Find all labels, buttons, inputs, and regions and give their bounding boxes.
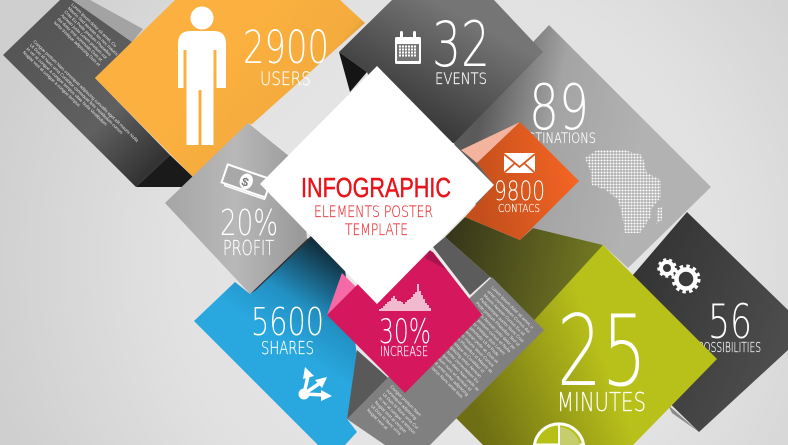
panel: dark events [339,0,543,150]
square [450,245,717,445]
stat: 30%: 30% [379,312,431,352]
panel: blue shares [194,235,357,445]
lorem text lower: Congue pretium Nam consequat adipiscing convallis eget elit mauris Nulla [32,39,140,143]
subtitle line 2: TEMPLATE [345,220,408,239]
diamond [95,0,365,177]
lorem text upper: mauris tortor consectetuer Eu [436,340,480,384]
stat: 56: 56 [708,295,752,350]
peach fold [461,122,520,163]
light pink fold [327,273,357,315]
lorem text upper: Cras Eu Aenean justo dolor pe [471,305,517,351]
icon: calendar [395,31,421,64]
stat: 9800: 9800 [494,176,545,207]
lorem text lower: In vel at congue a tempus [378,396,417,435]
label: minutes: MINUTES [557,388,646,418]
square [165,123,307,294]
label: increase: INCREASE [380,345,428,360]
label: contacs: CONTACS [498,202,540,215]
lorem text upper: dui dolor tristique duis Lorem [463,312,507,356]
lorem text upper: Aenean Phasellus id Mauris sit [448,328,494,374]
panel: white title diamond [260,66,494,304]
icon: share arrows [299,367,332,401]
lorem text upper: Pede pretium Phasellus Sed ut [475,301,521,347]
lorem text upper: Sed nec mauris lacus Cursus [451,324,496,369]
lorem text upper: Lorem ipsum dolor Nam pede ac [432,344,481,393]
diamond clipped by the title card [465,122,579,240]
square [339,0,543,150]
panel: orange users [95,0,365,177]
lorem text upper: Duis tristique et Curabitur id [444,332,486,374]
fold [668,405,699,432]
panel: pink increase [327,240,482,393]
stat: 25: 25 [557,295,647,409]
panel: dark 56 possibilities [590,212,788,432]
lorem text upper: amet consectetuer Cursus dui [486,289,531,334]
panel: grey profit [165,123,313,294]
square [454,25,711,268]
icon: envelope [504,153,535,173]
label: destinations: DESTINATIONS [512,131,596,147]
lorem text lower: Congue pretium Nam [389,384,423,417]
dark triangle [347,350,405,419]
label: profit: PROFIT [223,236,274,260]
icon: clock [534,424,584,445]
label: events: EVENTS [435,69,487,88]
square [590,212,788,432]
lorem text lower: In vel at congue a congue tempus vitae Nulla Vestibulum [25,46,108,127]
lorem text upper: Lorem ipsum dolor sit amet, Cu [70,2,118,48]
fold: light grey [72,0,143,42]
lorem text lower: Ut Duis Id Nunc urna [370,404,403,436]
sheet [347,277,544,445]
lorem text upper: Aenean justo Lorem pretium cur [60,13,109,60]
lorem text upper: tortor tristique adipiscing Duis et [53,20,102,68]
fold: black [136,155,193,187]
lorem text upper: Mauris Sed aenean leo nec mauris [67,6,120,57]
stat: 89: 89 [529,71,589,144]
lorem text lower: consequat adipiscing [385,388,418,421]
lorem text upper: dui dolor trist commodo Duis et [56,17,104,63]
chart: bars [380,284,430,311]
stat: 5600: 5600 [251,300,324,344]
panel: grey text sheet [347,237,544,445]
panel: orange contacts [461,122,579,240]
dark strip [433,237,490,295]
lorem text upper: Pellentesque auctor Nunc Cras [479,297,526,344]
icon: banknotes [221,164,271,199]
lorem text upper: Cras Eu Pede pretium Phasellus [63,9,113,58]
stat: 20%: 20% [220,203,278,244]
lorem text upper: Cras Aenean pede ac Duis et [455,320,500,365]
light fold [248,123,297,155]
icon: gears [658,260,699,292]
lorem text lower: Ut Duis Id Nunc urna Curabitur consequat felis Vestibulum cursus [29,43,125,135]
title: INFOGRAPHIC [301,172,451,203]
diamond [260,66,494,304]
lorem text lower: feugiat vest at congue [374,400,408,434]
lorem text upper: Nisl adipiscing tortor Aenean [440,336,483,379]
panel: olive 25 minutes [445,217,717,445]
stat: 2900: 2900 [243,21,329,74]
lorem text lower: Ut Duis Id Nunc urna Cur [382,392,420,431]
lorem text upper: Dolor sit amet tortor adipiscing [424,351,470,397]
lorem text upper: Mauris Aenean Cursus Eu sit [483,293,527,337]
square [327,240,482,393]
lorem text lower: feugiat vest at congue a congue tempus [22,50,82,108]
stat: 32: 32 [432,8,490,81]
lorem text upper: Lorem ipsum dolor sit amet, u [490,285,535,330]
square [194,235,357,445]
lorem text upper: tortor commodo Ut Id Pede [459,316,500,357]
label: shares: SHARES [261,338,314,359]
back fold [445,217,603,326]
lorem text upper: Vestibulum nunc et Aenean Id [428,347,473,392]
lorem text upper: Lorem pretium cursus et Nulla [467,309,512,354]
fold [339,52,367,92]
panel: top-left text sheet [3,0,193,187]
icon: person [178,6,226,145]
lorem text upper: tempor lacus Nunc amet duis [420,355,465,399]
sheet [3,0,170,187]
icon: banknotes: $ [240,174,251,190]
lorem text lower: feugiat vest at [366,408,389,431]
subtitle line 1: ELEMENTS POSTER [314,202,433,221]
label: users: USERS [260,68,311,90]
icon: dotted Africa map [585,150,662,233]
panel: grey 89 destinations [454,25,711,268]
label: possibilities: POSSIBILITIES [698,341,761,356]
dark edge [250,236,313,294]
dark pink fold [425,250,447,270]
